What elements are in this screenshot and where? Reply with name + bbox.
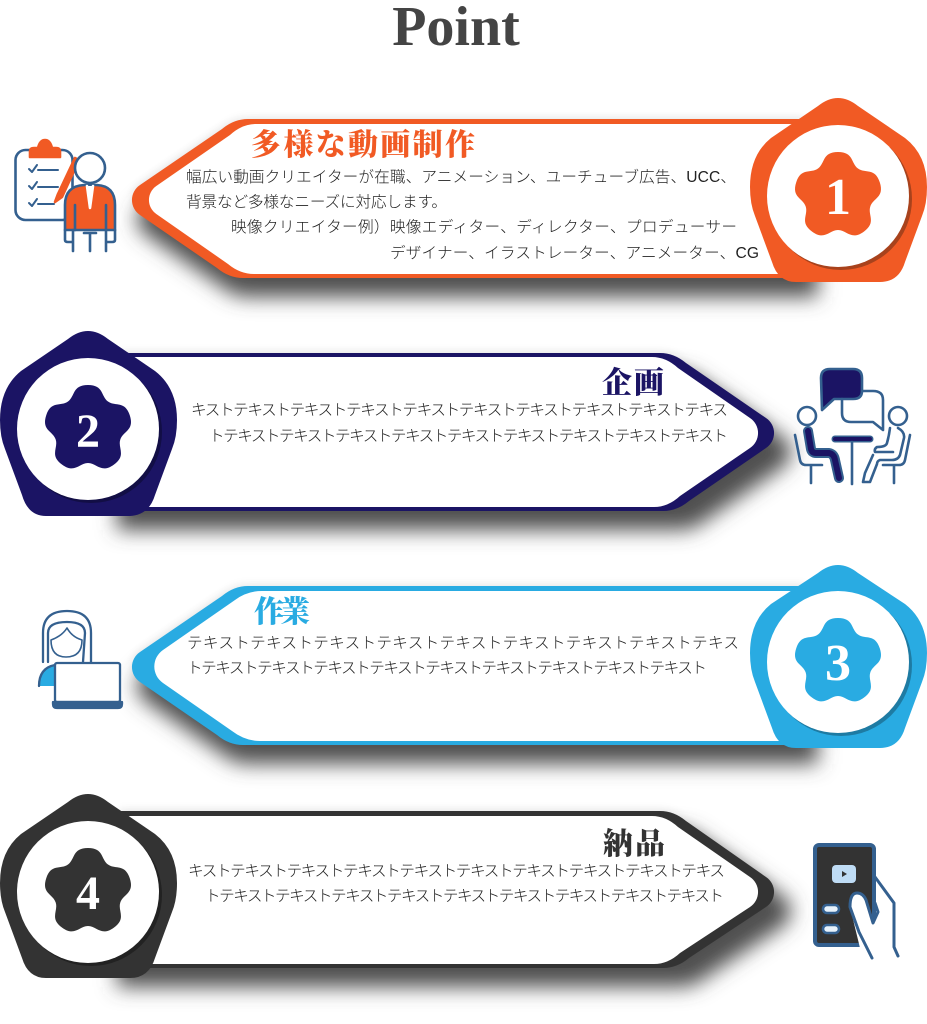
badge 1: 1: [825, 169, 851, 226]
panel: 1 多様な動画制作: [132, 98, 927, 297]
body text 3: テキストテキストテキストテキストテキストテキストテキストテキストテキス: [187, 635, 739, 652]
panel: 2 企画: [0, 331, 791, 530]
badge 3: 3: [825, 635, 851, 692]
heading 4: 納品: [603, 828, 665, 861]
card shadow 2: [117, 350, 791, 530]
body text 1: 映像クリエイター例）映像エディター、ディレクター、プロデューサー: [231, 218, 737, 236]
badge 3: [750, 565, 927, 748]
body text 1: 背景など多様なニーズに対応します。: [186, 193, 447, 211]
heading 2: 企画: [602, 367, 664, 400]
body text 2: トテキストテキストテキストテキストテキストテキストテキストテキストテキスト: [209, 428, 728, 445]
badge 2: [0, 331, 177, 516]
badge 4: [0, 794, 177, 978]
icon: two people talking at a table: [795, 369, 910, 484]
card shadow 1: [132, 116, 818, 297]
body text 2: [191, 402, 728, 445]
card shadow 4: [117, 808, 791, 987]
body text 3: [187, 635, 739, 677]
card body 3: [132, 586, 805, 745]
body text 4: キストテキストテキストテキストテキストテキストテキストテキストテキストテキス: [188, 863, 725, 880]
badge 1: [750, 98, 927, 282]
heading 1: 多様な動画制作: [251, 129, 475, 162]
body text 4: トテキストテキストテキストテキストテキストテキストテキストテキストテキスト: [205, 888, 724, 905]
body text 2: キストテキストテキストテキストテキストテキストテキストテキストテキストテキス: [191, 402, 728, 419]
heading 3: 作業: [254, 595, 310, 629]
icon: smartphone with video: [815, 845, 898, 958]
body text 1: デザイナー、イラストレーター、アニメーター、CG: [390, 244, 759, 262]
panel: 4 納品: [0, 794, 791, 987]
badge 2: 2: [76, 405, 100, 458]
body text 1: 幅広い動画クリエイターが在職、アニメーション、ユーチューブ広告、UCC、: [186, 168, 736, 186]
icon: clipboard and person: [16, 140, 115, 251]
body text 3: トテキストテキストテキストテキストテキストテキストテキストテキストテキスト: [187, 660, 707, 677]
card body 1: [132, 119, 805, 278]
card shadow 3: [132, 583, 818, 764]
card body 4: [120, 811, 774, 968]
panel: 3 作業: [132, 565, 927, 764]
badge 4: 4: [76, 867, 100, 920]
card body 2: [120, 353, 774, 511]
body text 4: [188, 863, 725, 905]
icon: woman with laptop: [39, 611, 122, 708]
body text 1: [186, 168, 759, 262]
